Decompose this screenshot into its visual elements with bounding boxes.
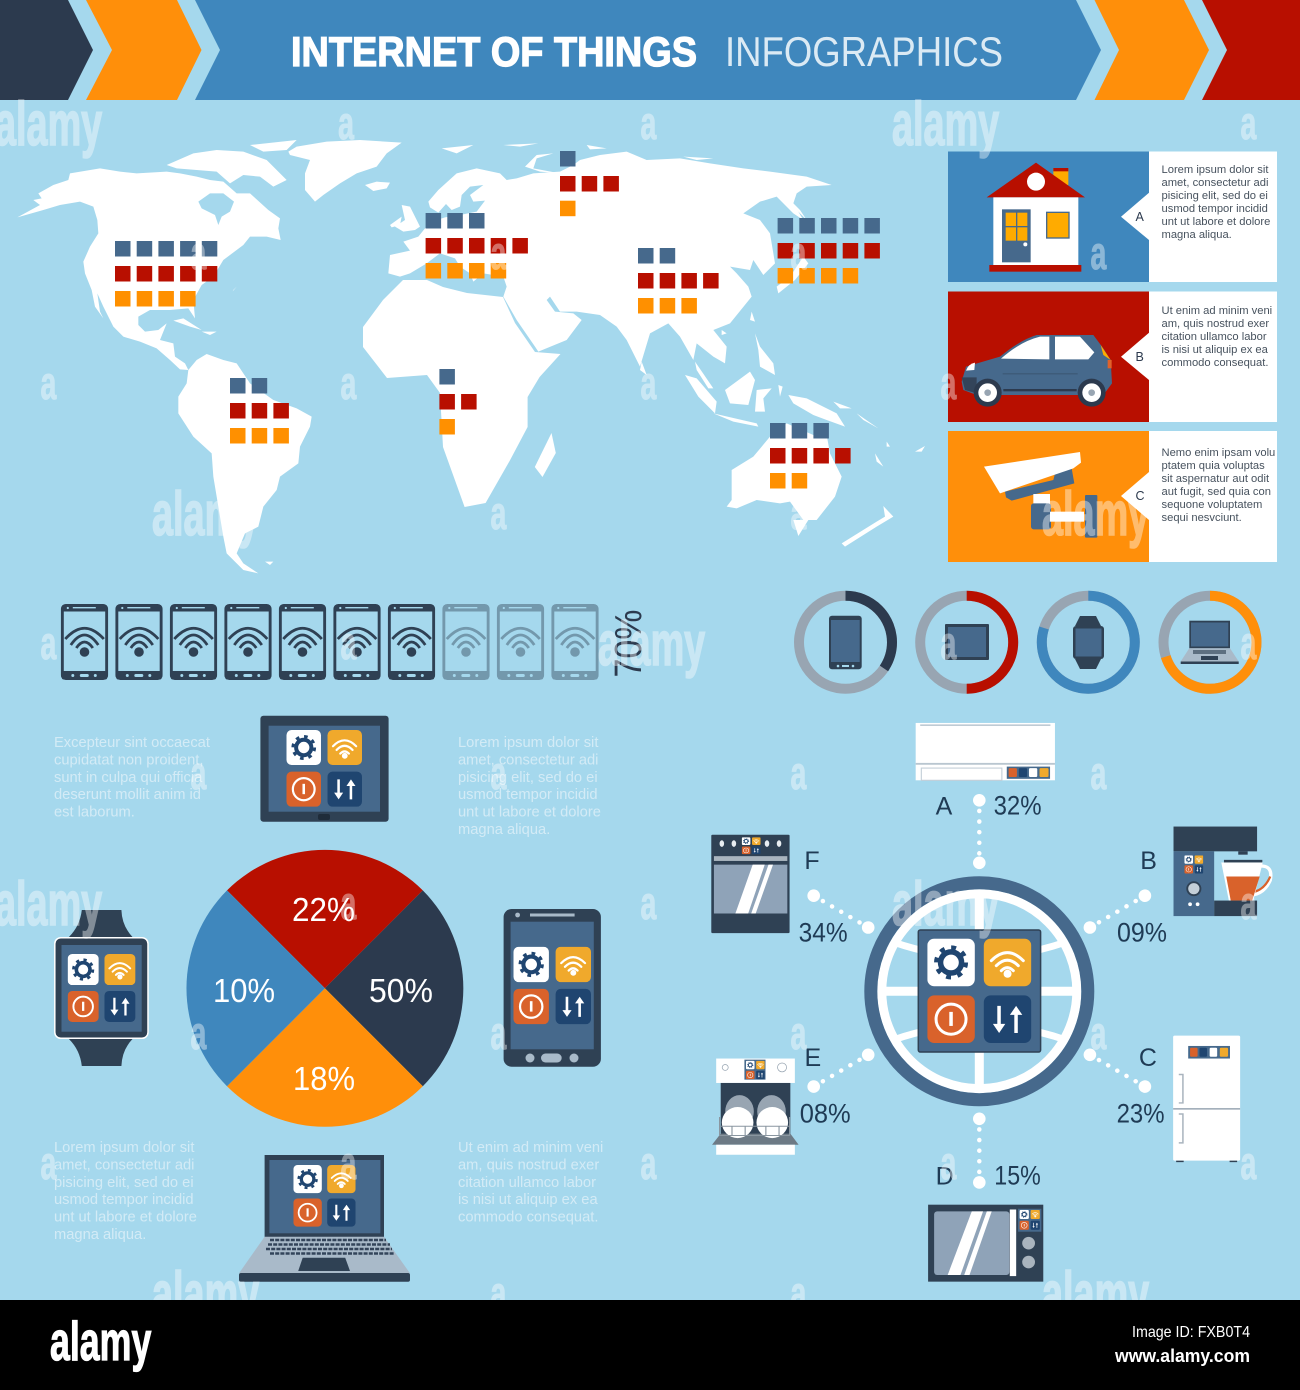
label D 15 percent: 15%: [994, 1161, 1041, 1191]
icon: laptop with apps: [239, 1155, 410, 1282]
app tiles: [514, 947, 591, 1024]
watermark letters: a: [940, 358, 957, 410]
header chevron navy: [0, 0, 93, 100]
label C 23 percent: 23%: [1117, 1098, 1165, 1128]
text block C: sequone voluptatem: [1162, 499, 1262, 511]
Africa: [363, 280, 560, 507]
text block A: magna aliqua.: [1162, 229, 1232, 241]
watermark letters: a: [1240, 358, 1257, 410]
label C 23 percent: C: [1139, 1044, 1157, 1072]
squares: Africa: [439, 369, 477, 434]
phone 2: [116, 605, 162, 680]
label A 32 percent: 32%: [994, 790, 1042, 820]
Ellesmere: [250, 140, 297, 152]
website: www.alamy.com: [1114, 1346, 1250, 1366]
text block A: pisicing elit, sed do ei: [1162, 190, 1268, 202]
Malay peninsula: [695, 362, 713, 388]
icon: air conditioner: [916, 723, 1055, 780]
watermark letters: a: [1090, 228, 1107, 280]
Caribbean islands: [173, 287, 237, 335]
text block B: [1162, 305, 1272, 369]
phone 3: [171, 605, 216, 680]
header main blue band: [195, 0, 1101, 100]
watermark letters: a: [40, 618, 57, 670]
Indonesia and Philippines: [640, 333, 783, 427]
icon: security camera: [984, 452, 1097, 538]
phone 9 faded: [498, 605, 543, 680]
squares: North America: [115, 241, 217, 306]
watermark letters: a: [640, 98, 657, 150]
Japan and Sakhalin: [777, 197, 808, 293]
slice 10 percent: [186, 890, 325, 1086]
donut: phone: [799, 596, 892, 689]
text block: lower left: Lorem ipsum dolor sit: [54, 1140, 194, 1156]
connector dots: [807, 794, 1151, 1189]
watermark letters: a: [490, 488, 507, 540]
text block: upper left: est laborum.: [54, 805, 135, 821]
watermark letters: a: [490, 228, 507, 280]
watermark words: alamy: [892, 869, 1000, 938]
icon: car: [962, 335, 1112, 407]
hub: globe: [871, 883, 1088, 1100]
text block: upper left: deserunt mollit anim id: [54, 787, 201, 803]
text block: lower left: usmod tempor incidid: [54, 1192, 194, 1208]
text block: lower right: is nisi ut aliquip ex ea: [458, 1192, 598, 1208]
label C: C: [1136, 489, 1145, 503]
text block: upper left: cupidatat non proident,: [54, 752, 203, 768]
world map: [17, 140, 925, 573]
label B 09 percent: 09%: [1117, 918, 1167, 948]
hub tablet: [918, 930, 1041, 1052]
text block A: amet, consectetur adi: [1162, 177, 1268, 189]
text block C: [1162, 447, 1275, 524]
watermark words: alamy: [892, 89, 1000, 158]
pie labels: 18%: [293, 1060, 355, 1097]
Iceland: [365, 182, 390, 191]
app tiles: [927, 939, 1031, 1043]
icon: watch: [1073, 616, 1104, 669]
text block B: Ut enim ad minim veni: [1162, 305, 1272, 317]
icon: smart watch: [55, 910, 148, 1066]
Tasmania: [793, 520, 808, 536]
watermark letters: a: [190, 748, 207, 800]
text block B: is nisi ut aliquip ex ea: [1162, 344, 1269, 356]
New Guinea and Pacific islands: [788, 395, 925, 467]
Madagascar: [535, 433, 556, 477]
title: [291, 28, 1003, 75]
label A 32 percent: [936, 790, 1042, 820]
icon: tablet: [945, 624, 989, 660]
squares: China: [638, 248, 719, 314]
text block A: usmod tempor incidid: [1162, 203, 1268, 215]
text block: lower left: [54, 1140, 197, 1243]
watermark letters: a: [640, 878, 657, 930]
South America: [178, 354, 312, 573]
icon: house: [987, 163, 1085, 272]
image id: Image ID: FXB0T4: [1132, 1324, 1250, 1341]
phone 4: [225, 605, 271, 680]
watermark words: alamy: [1042, 479, 1150, 548]
text block B: citation ullamco labor: [1162, 331, 1267, 343]
watermark letters: a: [790, 748, 807, 800]
header chevron orange left: [86, 0, 202, 100]
Americas: [17, 140, 402, 573]
label F 34 percent: [799, 847, 848, 948]
header chevron red: [1202, 0, 1300, 100]
label D 15 percent: D: [936, 1163, 954, 1191]
North America: [17, 168, 281, 370]
text block: upper right: [458, 735, 601, 838]
squares: Europe: [426, 213, 528, 278]
text block C: aut fugit, sed quia con: [1162, 486, 1271, 498]
text block: lower right: am, quis nostrud exer: [458, 1157, 599, 1173]
watermark letters: a: [340, 618, 357, 670]
watermark letters: a: [790, 488, 807, 540]
Greenland: [288, 140, 402, 202]
text block: lower left: unt ut labore et dolore: [54, 1210, 197, 1226]
text block A: unt ut labore et dolore: [1162, 216, 1270, 228]
label B 09 percent: [1117, 847, 1167, 948]
Eurasia: [388, 143, 832, 367]
icon: oven: [711, 835, 790, 933]
watermark letters: a: [490, 1268, 507, 1320]
phone wifi row 70 percent: [62, 605, 650, 680]
panel: card B connected car: [948, 292, 1277, 422]
watermark words: alamy: [1042, 1259, 1150, 1328]
watermark letters: a: [790, 1008, 807, 1060]
label C 23 percent: [1117, 1044, 1165, 1128]
watermark letters: a: [640, 358, 657, 410]
phone 7: [389, 605, 434, 680]
appliances: [711, 723, 1271, 1282]
label E 08 percent: [800, 1044, 851, 1128]
text block: lower right: [458, 1140, 603, 1226]
70 percent label: 70%: [608, 610, 650, 678]
squares: Russia: [560, 151, 619, 216]
label D 15 percent: [936, 1161, 1041, 1191]
Arctic archipelago: [167, 150, 287, 187]
label E 08 percent: E: [805, 1044, 821, 1072]
donut: laptop: [1164, 596, 1256, 689]
phone 8 faded: [443, 605, 489, 680]
panel: card A smart home: [948, 152, 1277, 282]
slice 22 percent: [227, 850, 423, 988]
watermark letters: a: [1240, 98, 1257, 150]
Taiwan and Hainan: [722, 312, 755, 335]
header banner: [0, 0, 1300, 100]
icon: dishwasher: [712, 1059, 799, 1155]
map data squares: [115, 151, 880, 488]
watermark letters: a: [1240, 1138, 1257, 1190]
text block: lower right: commodo consequat.: [458, 1210, 598, 1226]
watermark letters: a: [940, 1138, 957, 1190]
icon: smartphone: [504, 909, 601, 1067]
watermark words: alamy: [598, 609, 706, 678]
text block: upper left: sunt in culpa qui officia: [54, 770, 203, 786]
text block: lower right: citation ullamco labor: [458, 1175, 596, 1191]
label F 34 percent: F: [804, 847, 820, 875]
squares: East Asia: [778, 218, 880, 284]
watermark words: alamy: [152, 1259, 260, 1328]
label A: A: [1136, 210, 1144, 224]
New Zealand: [842, 506, 893, 547]
watermark letters: a: [1240, 618, 1257, 670]
text block: upper right: usmod tempor incidid: [458, 787, 598, 803]
app tiles: [293, 1165, 356, 1227]
text block C: ptatem quia voluptas: [1162, 460, 1265, 472]
icon: microwave: [928, 1205, 1043, 1282]
watermark letters: a: [1240, 878, 1257, 930]
watermark letters: a: [640, 1138, 657, 1190]
watermark letters: a: [790, 228, 807, 280]
globe outer ring: [871, 883, 1088, 1100]
watermark letters: a: [40, 1138, 57, 1190]
watermark letters: a: [490, 1008, 507, 1060]
watermark letters: a: [190, 1008, 207, 1060]
Australia: [727, 423, 842, 520]
pie labels: 22%: [292, 891, 355, 928]
phone 6: [334, 605, 380, 680]
watermark letters: a: [340, 1138, 357, 1190]
donut: watch: [1042, 596, 1135, 689]
watermark letters: a: [1090, 1008, 1107, 1060]
text block: upper left: Excepteur sint occaecat: [54, 735, 210, 751]
text block: lower right: Ut enim ad minim veni: [458, 1140, 603, 1156]
donut: tablet: [920, 596, 1013, 689]
app tiles: [286, 730, 362, 807]
northern islands: [442, 143, 713, 173]
text block: lower left: pisicing elit, sed do ei: [54, 1175, 194, 1191]
Southeast Asia and Oceania: [640, 333, 925, 547]
label B 09 percent: B: [1140, 847, 1157, 875]
phone 1: [62, 605, 107, 680]
watermark letters: a: [190, 228, 207, 280]
watermark letters: a: [490, 748, 507, 800]
watermark letters: a: [340, 878, 357, 930]
pie labels: 50%: [369, 972, 433, 1009]
icon: laptop: [1181, 621, 1239, 664]
pie labels: [213, 891, 433, 1097]
slice 18 percent: [227, 988, 423, 1127]
icon: fridge: [1173, 1036, 1240, 1162]
icon: tablet with apps: [260, 716, 389, 822]
text block B: am, quis nostrud exer: [1162, 318, 1269, 330]
watermark letters: a: [940, 618, 957, 670]
label F 34 percent: 34%: [799, 918, 848, 948]
text block A: Lorem ipsum dolor sit: [1162, 164, 1269, 176]
watermark words: alamy: [152, 479, 260, 548]
watermark letters: a: [340, 358, 357, 410]
text block B: commodo consequat.: [1162, 357, 1268, 369]
text block C: Nemo enim ipsam volu: [1162, 447, 1275, 459]
slice 50 percent: [325, 890, 463, 1086]
app tiles: [68, 954, 135, 1022]
label E 08 percent: 08%: [800, 1098, 851, 1128]
Hudson Bay: [198, 193, 234, 225]
text block: lower left: amet, consectetur adi: [54, 1157, 194, 1173]
alamy logo text: alamy: [50, 1310, 152, 1372]
title: INFOGRAPHICS: [725, 28, 1003, 75]
squares: Australia: [770, 423, 851, 488]
title: INTERNET OF THINGS: [291, 28, 697, 75]
icon: coffee machine: [1174, 827, 1271, 916]
watermark letters: a: [790, 1268, 807, 1320]
header chevron orange right: [1094, 0, 1209, 100]
pie labels: 10%: [213, 972, 275, 1009]
Falklands: [265, 562, 273, 565]
British Isles: [390, 205, 420, 232]
pie chart: [186, 850, 463, 1127]
text block C: sequi nesvciunt.: [1162, 512, 1242, 524]
label A 32 percent: A: [936, 792, 953, 820]
text block: upper right: pisicing elit, sed do ei: [458, 770, 598, 786]
text block C: sit aspernatur aut odit: [1162, 473, 1270, 485]
text block: upper right: magna aliqua.: [458, 822, 550, 838]
icon: phone: [829, 616, 862, 669]
panel: card C security camera: [948, 431, 1277, 562]
watermark letters: a: [1090, 748, 1107, 800]
hub labels: [799, 790, 1167, 1191]
text block: lower left: magna aliqua.: [54, 1227, 146, 1243]
footer bar: [0, 1300, 1300, 1390]
phone 10 faded: [552, 605, 598, 680]
watermark letters: a: [40, 358, 57, 410]
squares: South America: [230, 378, 289, 444]
watermark letters: a: [338, 98, 354, 150]
text block: upper right: Lorem ipsum dolor sit: [458, 735, 598, 751]
text block: upper left: [54, 735, 210, 821]
globe wire lines: [882, 894, 1077, 1089]
text block A: [1162, 164, 1270, 241]
text block: upper right: unt ut labore et dolore: [458, 805, 601, 821]
phone 5: [280, 605, 325, 680]
label B: B: [1136, 350, 1144, 364]
watermark words: [0, 89, 1150, 1328]
text block: upper right: amet, consectetur adi: [458, 752, 598, 768]
